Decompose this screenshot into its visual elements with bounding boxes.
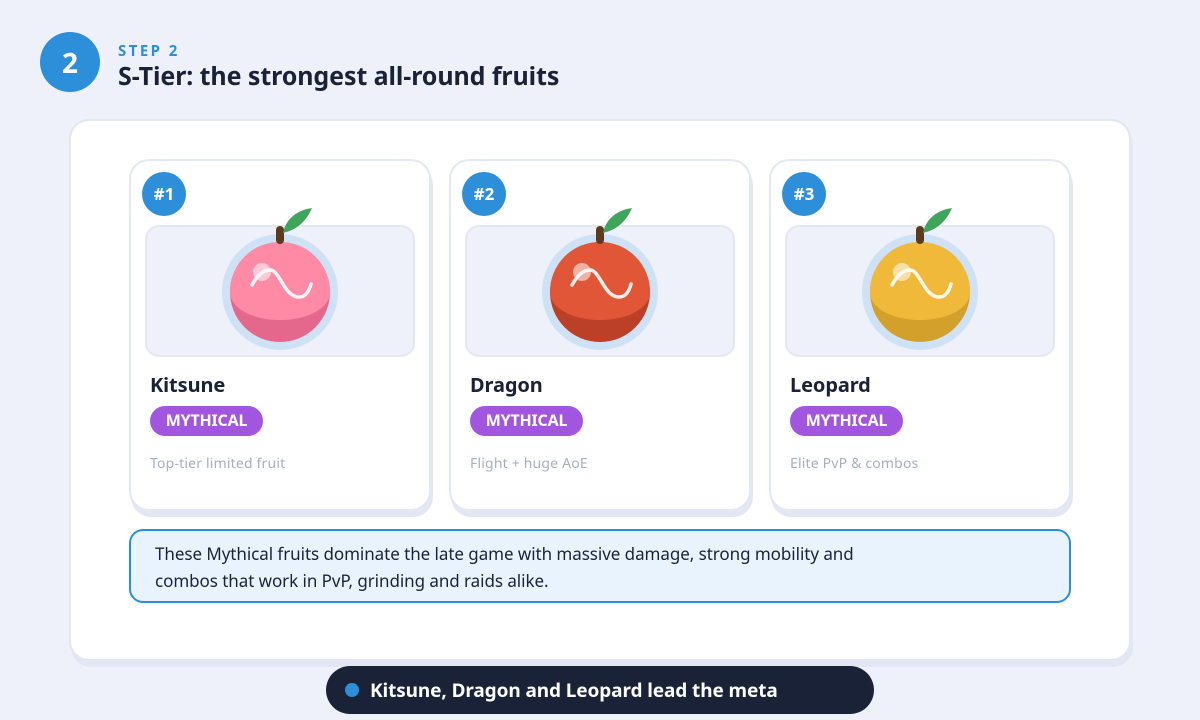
panel: Dragon card xyxy=(449,159,751,511)
title: S-Tier: the strongest all-round fruits xyxy=(118,59,559,93)
image well xyxy=(785,225,1055,357)
callout text xyxy=(155,542,854,592)
rarity tag xyxy=(150,406,263,436)
callout text: combos that work in PvP, grinding and raids alike. xyxy=(155,569,548,592)
icon: pink fruit xyxy=(222,208,338,350)
rank badge xyxy=(462,172,506,216)
panel: Kitsune card xyxy=(129,159,431,511)
rank badge xyxy=(142,172,186,216)
bullet dot xyxy=(345,683,359,697)
rarity tag: MYTHICAL xyxy=(166,409,247,431)
rank badge: #3 xyxy=(794,182,814,205)
fruit name: Leopard xyxy=(790,371,871,398)
panel: main xyxy=(69,119,1131,661)
rarity tag xyxy=(790,406,903,436)
icon: red fruit xyxy=(542,208,658,350)
rarity tag: MYTHICAL xyxy=(486,409,567,431)
description: Top-tier limited fruit xyxy=(150,454,285,473)
takeaway text: Kitsune, Dragon and Leopard lead the meta xyxy=(370,677,778,703)
callout xyxy=(129,529,1071,603)
step number badge: 2 xyxy=(62,44,78,82)
image well xyxy=(465,225,735,357)
description: Flight + huge AoE xyxy=(470,454,588,473)
takeaway bar xyxy=(326,666,874,714)
icon: yellow fruit xyxy=(862,208,978,350)
step label: STEP 2 xyxy=(118,41,180,61)
rank badge: #1 xyxy=(154,182,174,205)
rarity tag: MYTHICAL xyxy=(806,409,887,431)
fruit name: Dragon xyxy=(470,371,543,398)
image well xyxy=(145,225,415,357)
rank badge xyxy=(782,172,826,216)
rank badge: #2 xyxy=(474,182,494,205)
fruit name: Kitsune xyxy=(150,371,225,398)
rarity tag xyxy=(470,406,583,436)
step number badge xyxy=(40,32,100,92)
callout text: These Mythical fruits dominate the late game with massive damage, strong mobility and xyxy=(155,542,854,565)
panel: Leopard card xyxy=(769,159,1071,511)
description: Elite PvP & combos xyxy=(790,454,918,473)
